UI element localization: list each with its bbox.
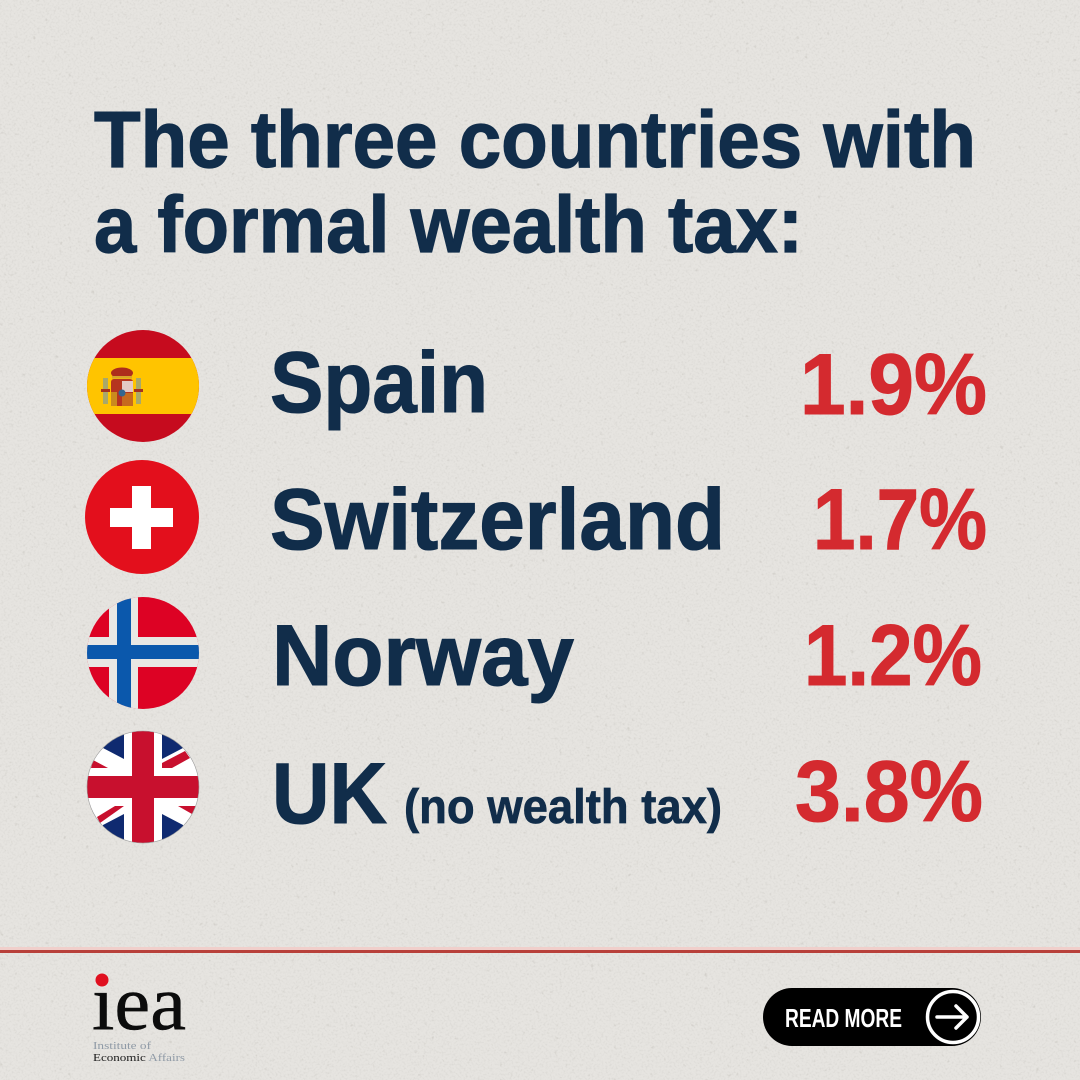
icon: Switzerland flag xyxy=(85,460,199,574)
row: UK xyxy=(87,731,983,843)
value: UK 3.8%: 3.8% xyxy=(795,744,983,840)
country name: Norway: Norway xyxy=(272,608,574,704)
value: Switzerland 1.7%: 1.7% xyxy=(813,472,987,568)
logo: Institute of Economic Affairs xyxy=(92,959,186,1064)
title xyxy=(94,95,976,269)
icon: Norway flag xyxy=(87,597,199,709)
title: The three countries with xyxy=(94,95,976,184)
value: Spain 1.9%: 1.9% xyxy=(800,337,987,433)
logo caption line one: Institute of xyxy=(93,1040,151,1052)
icon: Spain flag xyxy=(87,330,199,442)
icon: arrow in circle xyxy=(928,992,978,1042)
logo wordmark: iea xyxy=(92,959,186,1046)
row: Switzerland xyxy=(85,460,987,574)
button: read more xyxy=(763,988,981,1046)
logo caption line two: Economic Affairs xyxy=(93,1052,185,1064)
country name: UK: UK xyxy=(272,746,387,842)
value: Norway 1.2%: 1.2% xyxy=(804,608,982,704)
logo dot xyxy=(96,974,108,986)
button label: READ MORE xyxy=(785,1003,902,1033)
row: Norway xyxy=(87,597,982,709)
country name: Switzerland: Switzerland xyxy=(270,472,725,568)
title: a formal wealth tax: xyxy=(94,180,803,269)
country name: Spain: Spain xyxy=(270,335,488,431)
row: Spain xyxy=(87,330,987,442)
icon: UK flag xyxy=(87,731,199,843)
note: no wealth tax: (no wealth tax) xyxy=(404,781,722,834)
